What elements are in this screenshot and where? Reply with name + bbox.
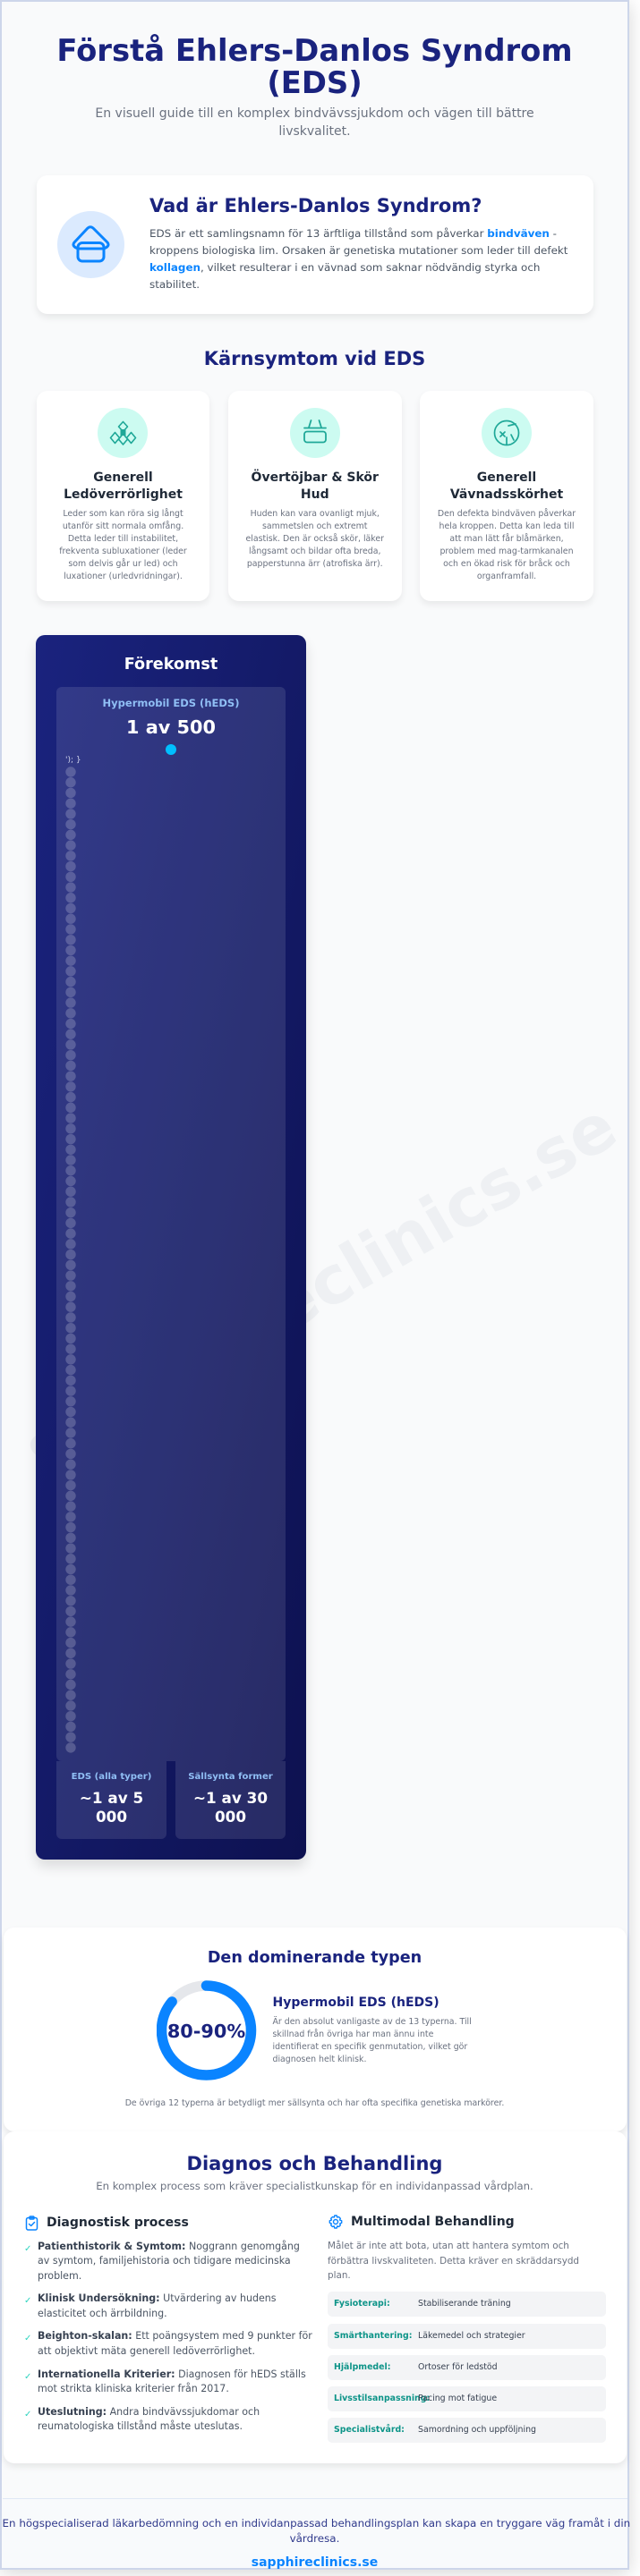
icon: skin — [290, 408, 340, 458]
row: pain management: Smärthantering: — [334, 2331, 412, 2340]
list: diagnostic steps: ✓ — [24, 2296, 31, 2306]
title: skin: Övertöjbar & Skör — [252, 470, 379, 485]
step: criteria: mot strikta kliniska kriterier från 2017. — [38, 2383, 229, 2394]
text: joints — [59, 508, 187, 581]
heading: diagnostic process: Diagnostisk process — [47, 2216, 189, 2230]
icon: tissue — [482, 408, 532, 458]
row: lifestyle: Livsstilsanpassning: — [334, 2394, 430, 2403]
panel: symptom joints — [37, 391, 209, 601]
text: tissue: Den defekta bindväven påverkar — [438, 509, 576, 519]
icon: house — [57, 211, 124, 278]
text: definition: kroppens biologiska lim. Orsaken är genetiska mutationer som leder till defekt — [149, 244, 567, 257]
label: rare forms: Sällsynta former — [188, 1772, 273, 1782]
list: diagnostic steps — [24, 2240, 312, 2432]
step: exam: Klinisk Undersökning: Utvärdering av hudens — [38, 2292, 277, 2304]
closing text — [2, 2517, 630, 2545]
highlighted dot — [166, 744, 176, 755]
step: exclusion: reumatologiska tillstånd måste uteslutas. — [38, 2420, 243, 2432]
text: treatment goal: plan. — [328, 2270, 351, 2281]
heading: what is EDS: Vad är Ehlers-Danlos Syndrom? — [149, 195, 482, 216]
value: all types: 000 — [96, 1808, 127, 1826]
row: physiotherapy: Fysioterapi: — [334, 2299, 390, 2309]
text: treatment goal: Målet är inte att bota, utan att hantera symtom och — [328, 2241, 569, 2251]
text: joints: luxationer (urledvridningar). — [64, 572, 183, 581]
text: definition: EDS är ett samlingsnamn för 13 ärftliga tillstånd som påverkar bindväven - — [149, 227, 557, 240]
text: skin: Huden kan vara ovanligt mjuk, — [251, 509, 380, 519]
label: hEDS: Hypermobil EDS (hEDS) — [103, 697, 239, 709]
row: aids: Hjälpmedel: — [334, 2361, 390, 2372]
row: physiotherapy: Stabiliserande träning — [418, 2299, 511, 2309]
row: pain management — [328, 2324, 606, 2349]
text: joints: som delvis går ur led) och — [68, 559, 178, 569]
value: all types — [80, 1789, 143, 1826]
text: tissue: organframfall. — [477, 572, 536, 581]
title: joints: Ledöverrörlighet — [64, 487, 183, 502]
watermark: sapphireclinics.se — [12, 1088, 629, 1488]
row: specialist care — [328, 2418, 606, 2443]
website link: sapphireclinics.se — [252, 2555, 378, 2570]
stray code text: '); } — [65, 756, 81, 765]
text: treatment goal — [328, 2240, 579, 2281]
title: tissue: Vävnadsskörhet — [450, 487, 563, 502]
step: exclusion: Uteslutning: Andra bindvävssjukdomar och — [38, 2406, 260, 2417]
donut chart — [157, 1980, 256, 2080]
step: history: av symtom, familjehistoria och tidigare medicinska — [38, 2255, 291, 2267]
title: skin — [252, 469, 379, 502]
title: tissue — [450, 470, 563, 502]
text: hEDS — [272, 2016, 472, 2064]
text: joints: Leder som kan röra sig långt — [63, 509, 183, 519]
heading: hEDS: Hypermobil EDS (hEDS) — [272, 1996, 439, 2010]
subtitle — [95, 106, 534, 139]
heading: dominant type: Den dominerande typen — [208, 1949, 422, 1967]
row: specialist care: Specialistvård: — [334, 2425, 405, 2435]
dot column — [65, 767, 76, 1753]
list: diagnostic steps: ✓ — [24, 2372, 31, 2381]
step: history — [24, 2240, 300, 2281]
step: Beighton — [24, 2330, 312, 2356]
closing text: vårdresa. — [290, 2532, 339, 2545]
label: all types: EDS (alla typer) — [72, 1772, 151, 1782]
panel: diagnosis and treatment — [4, 2131, 627, 2463]
title: joints — [64, 470, 183, 502]
text: definition: stabilitet. — [149, 278, 200, 291]
footnote: De övriga 12 typerna är betydligt mer sällsynta och har ofta specifika genetiska markörer. — [125, 2098, 504, 2108]
panel: symptom skin — [227, 391, 402, 601]
step: exam: elasticitet och ärrbildning. — [38, 2308, 167, 2318]
panel: rare forms — [175, 1761, 286, 1839]
icon: joints — [98, 408, 148, 458]
panel: symptom tissue — [420, 391, 593, 601]
row: lifestyle — [328, 2386, 606, 2411]
text: treatment goal: förbättra livskvaliteten. Detta kräver en skräddarsydd — [328, 2256, 579, 2267]
step: criteria — [24, 2368, 306, 2394]
value: 1 in 500: 1 av 500 — [126, 716, 216, 738]
text: skin: långsamt och bildar ofta breda, — [249, 547, 380, 556]
text: joints: Detta leder till instabilitet, — [68, 534, 178, 544]
row: specialist care: Samordning och uppföljning — [418, 2425, 536, 2435]
panel: dominant type — [4, 1928, 627, 2131]
value: rare forms: 000 — [215, 1808, 246, 1826]
text: skin: elastisk. Den är också skör, läker — [245, 534, 384, 544]
panel: hEDS prevalence — [56, 687, 286, 1761]
footer — [2, 2498, 627, 2567]
heading: diagnosis and treatment: Diagnos och Behandling — [187, 2153, 442, 2174]
text: tissue — [438, 508, 576, 581]
row: physiotherapy — [328, 2292, 606, 2317]
text: hEDS: diagnosen helt klinisk. — [272, 2055, 366, 2064]
subtitle: En visuell guide till en komplex bindvävssjukdom och vägen till bättre — [95, 106, 534, 121]
text: tissue: att man lätt får blåmärken, — [449, 534, 564, 544]
text: joints: utanför sitt normala omfång. — [63, 521, 183, 531]
list: diagnostic steps: ✓ — [24, 2243, 31, 2254]
title: (EDS) — [267, 65, 363, 100]
title: Förstå Ehlers-Danlos Syndrom — [56, 33, 573, 68]
icon: clipboard — [25, 2216, 38, 2231]
text: skin: sammetslen och extremt — [262, 521, 367, 531]
step: Beighton: Beighton-skalan: Ett poängsystem med 9 punkter för — [38, 2330, 312, 2342]
value: rare forms: ~1 av 30 — [193, 1789, 268, 1807]
text: hEDS: skillnad från övriga har man ännu inte — [272, 2029, 433, 2039]
text: tissue: hela kroppen. Detta kan leda till — [439, 521, 574, 531]
title — [56, 33, 573, 100]
text: definition: kollagen, vilket resulterar i en vävnad som saknar nödvändig styrka och — [149, 261, 540, 274]
text: joints: frekventa subluxationer (leder — [59, 547, 187, 556]
heading: multimodal treatment: Multimodal Behandling — [351, 2215, 515, 2229]
text: tissue: problem med mag-tarmkanalen — [439, 547, 574, 556]
list: diagnostic steps: ✓ — [24, 2334, 31, 2343]
title: tissue: Generell — [477, 470, 536, 485]
row: pain management: Läkemedel och strategier — [418, 2331, 525, 2340]
step: exclusion — [24, 2406, 260, 2432]
row: lifestyle: Pacing mot fatigue — [418, 2394, 497, 2403]
icon: gear — [329, 2215, 342, 2229]
text: skin: papperstunna ärr (atrofiska ärr). — [247, 559, 383, 569]
closing text: En högspecialiserad läkarbedömning och en individanpassad behandlingsplan kan skapa en tryggare väg framåt i din — [2, 2517, 630, 2529]
panel: prevalence — [36, 635, 306, 1860]
panel: all types — [56, 1761, 166, 1839]
heading: prevalence: Förekomst — [124, 656, 218, 674]
step: history: problem. — [38, 2270, 81, 2281]
step: history: Patienthistorik & Symtom: Noggrann genomgång — [38, 2240, 300, 2252]
value: all types: ~1 av 5 — [80, 1789, 143, 1807]
heading: core symptoms: Kärnsymtom vid EDS — [204, 348, 425, 369]
step: Beighton: att objektivt mäta generell ledöverrörlighet. — [38, 2345, 255, 2356]
subheading: En komplex process som kräver specialistkunskap för en individanpassad vårdplan. — [96, 2180, 533, 2192]
text: hEDS: identifierat en specifik genmutation, vilket gör — [272, 2042, 467, 2052]
title: skin: Hud — [301, 487, 329, 502]
title: joints: Generell — [93, 470, 153, 485]
list: diagnostic steps: ✓ — [24, 2410, 31, 2419]
value: rare forms — [193, 1789, 268, 1826]
panel: what is EDS — [37, 175, 593, 314]
step: exam — [24, 2292, 277, 2318]
text: tissue: och en ökad risk för bråck och — [443, 559, 570, 569]
subtitle: livskvalitet. — [278, 124, 351, 139]
text: hEDS: Är den absolut vanligaste av de 13 typerna. Till — [272, 2017, 472, 2027]
step: criteria: Internationella Kriterier: Diagnosen för hEDS ställs — [38, 2368, 306, 2379]
text: definition — [149, 227, 567, 291]
text: skin — [245, 509, 384, 569]
donut chart: 80-90% — [166, 2021, 245, 2042]
row: aids: Ortoser för ledstöd — [418, 2361, 498, 2372]
row: aids — [328, 2354, 606, 2379]
